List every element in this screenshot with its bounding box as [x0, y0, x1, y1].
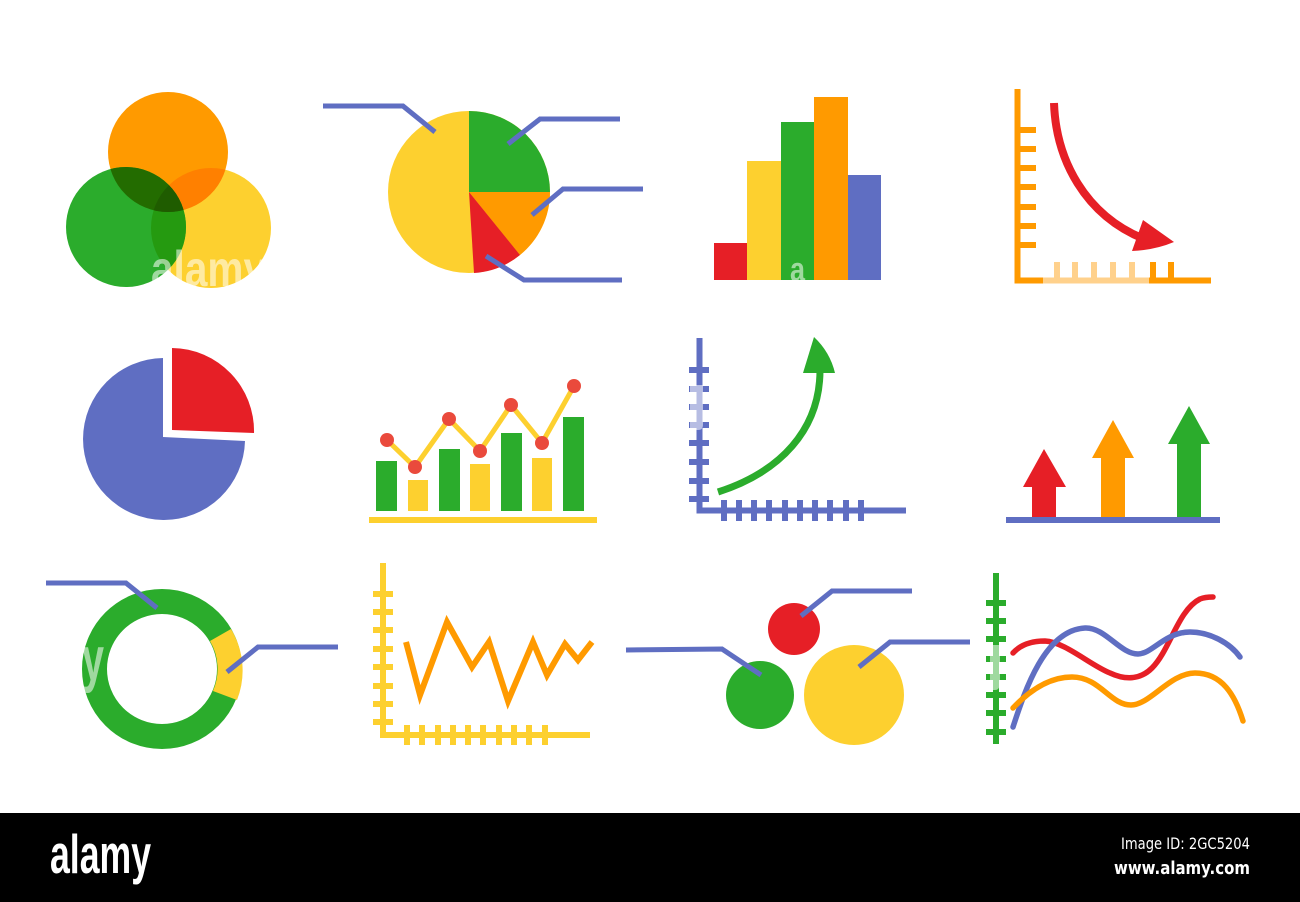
multi-line curve chart	[986, 573, 1243, 744]
rising curve chart	[689, 337, 906, 521]
image id: Image ID: 2GC5204	[1121, 834, 1250, 853]
watermark: alamy	[151, 241, 266, 297]
bubble chart with callouts	[626, 591, 970, 745]
alamy logo: alamy	[50, 823, 151, 885]
venn diagram	[66, 92, 271, 297]
watermark: y	[82, 625, 104, 694]
donut chart with callouts	[46, 583, 338, 736]
zigzag line chart	[373, 563, 592, 745]
three up arrows	[1006, 406, 1220, 523]
combo bar and line chart	[369, 379, 597, 523]
watermark: a	[790, 251, 806, 289]
website: www.alamy.com	[1114, 858, 1250, 879]
pie chart with callouts	[323, 106, 643, 280]
exploded pie chart	[83, 348, 254, 520]
bar chart	[714, 97, 881, 289]
declining curve chart	[1017, 89, 1211, 284]
footer bar	[0, 813, 1300, 902]
